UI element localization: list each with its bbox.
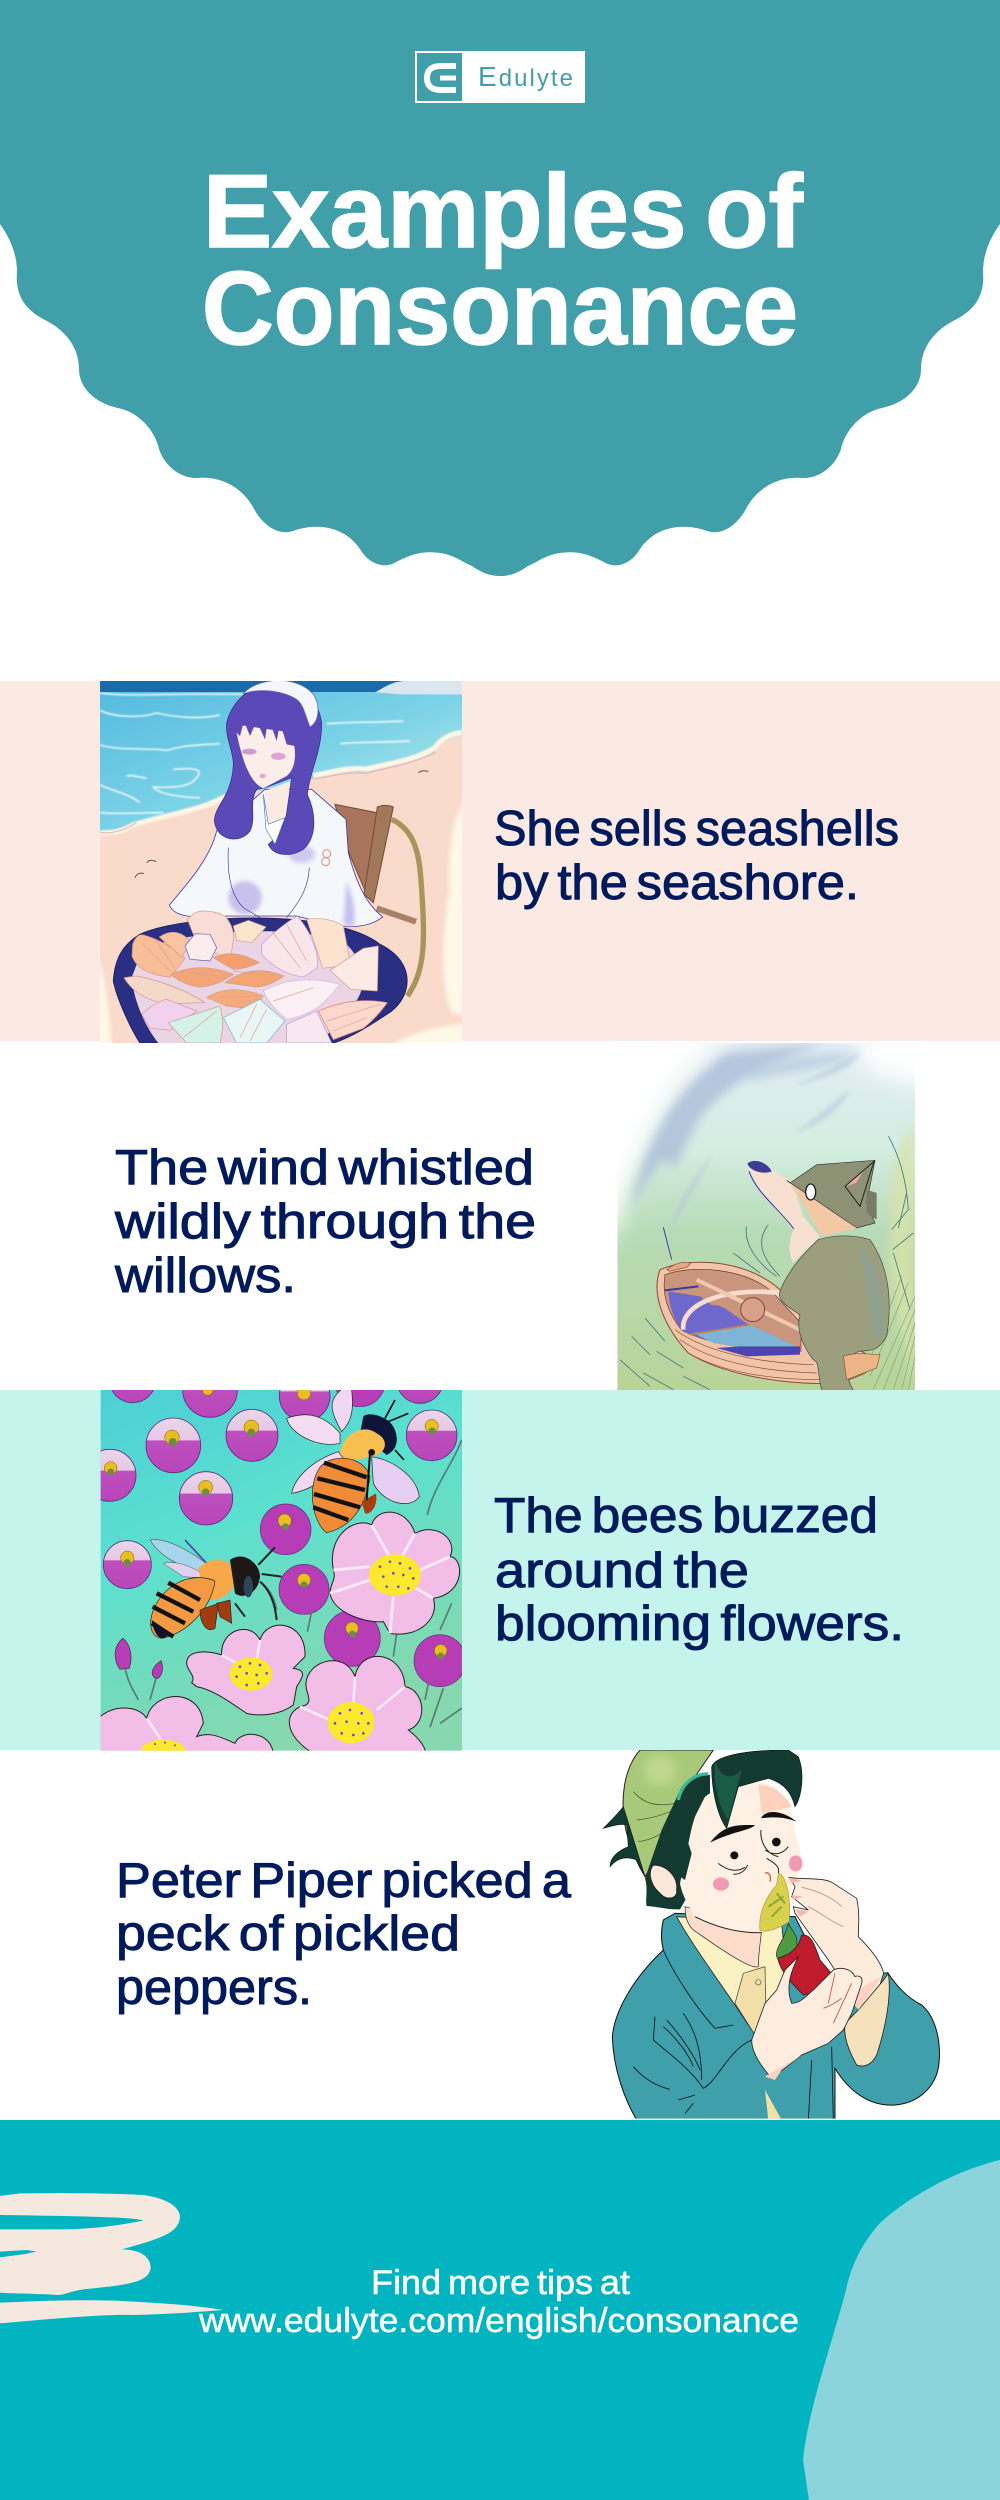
stems and buds (125, 1440, 462, 1727)
illustration: bees and flowers (100, 1390, 462, 1751)
text: wind (114, 1141, 536, 1303)
flower centres (141, 1554, 421, 1764)
face (680, 1782, 803, 1933)
text: peter piper: Peter Piper picked a (116, 1854, 572, 1908)
footer text: www.edulyte.com/english/consonance (198, 2302, 799, 2340)
illustration: girl with seashells (90, 680, 470, 1051)
text: peter piper: peck of pickled (116, 1907, 460, 1961)
footer text (198, 2264, 799, 2340)
stamens (104, 1385, 447, 1657)
bee left (150, 1540, 282, 1638)
lower hand (752, 1957, 862, 2078)
hat (623, 1750, 713, 1877)
bee top right (287, 1387, 419, 1533)
text: wind: willows. (114, 1249, 296, 1303)
title (202, 154, 803, 367)
upper hand (789, 1877, 884, 2010)
fox body (779, 1236, 889, 1390)
illustration: fox and boat in the wind (617, 1043, 915, 1390)
title: Examples of (203, 154, 803, 270)
text: wind: wildly through the (114, 1195, 536, 1249)
header scalloped shape (0, 0, 1000, 576)
ear (650, 1865, 677, 1898)
text: seashells (494, 802, 899, 910)
neck (685, 1907, 762, 1967)
text: seashells: by the seashore. (495, 856, 859, 910)
boat (657, 1262, 877, 1384)
leaf bite (760, 1873, 790, 1931)
cuff (845, 1973, 889, 2066)
mast (663, 1227, 672, 1260)
logo: Edulyte (478, 61, 573, 92)
grass (620, 1136, 913, 1390)
jacket (612, 1913, 939, 2120)
robe (169, 789, 383, 927)
fox head (747, 1161, 820, 1263)
text: bees: around the (495, 1544, 749, 1598)
text: bees: blooming flowers. (495, 1597, 904, 1651)
neck and collar (265, 781, 290, 824)
illustration: man eating pepper (603, 1750, 939, 2120)
face (235, 724, 295, 788)
footer brush stroke (0, 2193, 223, 2323)
text: peter piper (116, 1854, 572, 2015)
flower heads (100, 1390, 458, 1590)
footer text: Find more tips at (371, 2264, 631, 2302)
back hair (603, 1807, 645, 1877)
panel: footer (0, 2120, 1000, 2500)
bowl (113, 918, 407, 1043)
chair (335, 804, 377, 894)
headband (243, 680, 318, 727)
front hair (712, 1750, 802, 1828)
shells (124, 911, 387, 1043)
panel: seashells band (0, 681, 1000, 1041)
text: wind: The wind whistled (115, 1141, 534, 1195)
text: bees (494, 1489, 904, 1651)
big flowers (100, 1512, 460, 1753)
logo (415, 51, 585, 103)
text: peter piper: peppers. (116, 1961, 312, 2015)
shirt (677, 1917, 787, 2035)
text: seashells: She sells seashells (494, 802, 899, 856)
text: bees: The bees buzzed (494, 1489, 878, 1543)
brows and eyes (710, 1812, 797, 1843)
footer blob (803, 2160, 1000, 2500)
panel: bees band (0, 1390, 1000, 1750)
title: Consonance (202, 251, 798, 367)
jacket seams (633, 1950, 833, 2120)
pepper (776, 1922, 798, 1958)
hair (214, 681, 322, 855)
